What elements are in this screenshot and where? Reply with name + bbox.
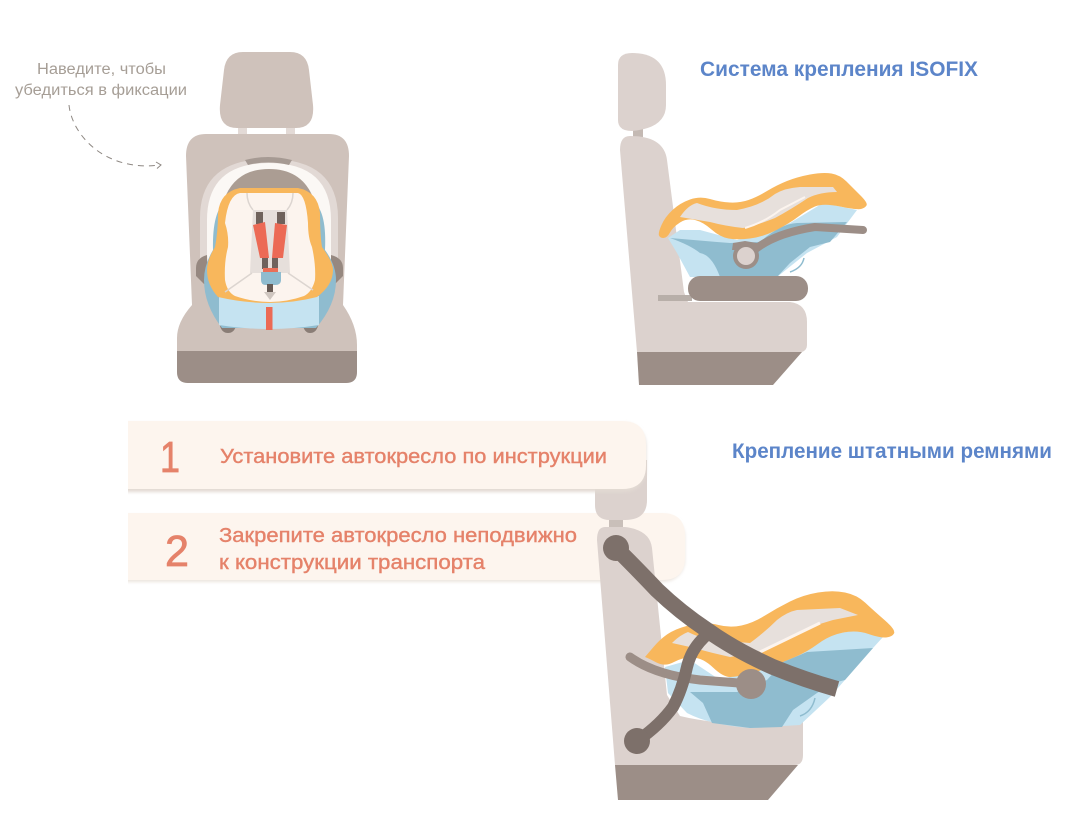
carrier shell dark blue [690,648,873,728]
shoulder belt strap [603,535,837,689]
illustration: front view of car seat with infant carrier [177,52,357,383]
carrier shell light blue [665,630,883,728]
hint text [15,61,187,99]
carrier wheels [220,326,318,333]
lower belt strap [624,630,713,754]
step 1 text: Установите автокресло по инструкции [220,446,607,468]
carrier handle [200,157,338,262]
arrow: dashed hint arrow [69,105,161,168]
headrest [595,460,647,528]
step 2 text: к конструкции транспорта [219,552,486,574]
carrier cream liner [225,193,315,302]
carrier liner highlight [745,197,805,228]
headrest [618,53,666,137]
illustration: side view with ISOFIX base [618,53,867,385]
heading: vehicle belts: Крепление штатными ремнями [732,440,1052,463]
step 2 text [219,525,577,574]
carrier liner highlight [760,623,820,652]
carrier liner [680,187,837,228]
crotch strap [266,307,272,330]
panel: step 1 card [100,421,646,492]
headrest [220,52,313,137]
carrier orange padding [207,188,333,303]
carrier shell light blue [668,203,857,277]
hint text: убедиться в фиксации [15,82,187,99]
carrier orange padding [659,173,867,239]
ISOFIX base [688,276,808,301]
harness panel lines [225,193,313,292]
carrier orange padding [645,591,894,677]
heading: ISOFIX: Система крепления ISOFIX [700,58,978,81]
carrier shell dark blue [670,222,847,277]
step 2 number: 2 [165,527,189,576]
carrier liner [672,608,858,657]
hint text: Наведите, чтобы [37,61,166,78]
seat back and cushion [177,134,357,352]
carrier side curve [790,258,804,272]
seat body [597,527,803,765]
seat base band [637,352,802,385]
harness straps [253,212,287,269]
carrier blue shell [204,200,336,328]
step 2 text: Закрепите автокресло неподвижно [219,525,577,547]
seat base band [177,351,357,383]
handle and pivot [732,227,863,269]
harness back panel [250,210,290,273]
panel: step 2 card [100,513,685,582]
handle with pivot [630,657,766,699]
carrier side curve [800,698,815,716]
carrier light blue front [219,296,319,329]
harness buckle [261,268,281,300]
seat base band [615,765,798,800]
seat body [620,136,807,352]
step 1 number: 1 [160,433,180,482]
carrier side pads [196,255,343,284]
illustration: side view with vehicle belts [595,460,894,800]
ISOFIX rail [658,295,692,301]
